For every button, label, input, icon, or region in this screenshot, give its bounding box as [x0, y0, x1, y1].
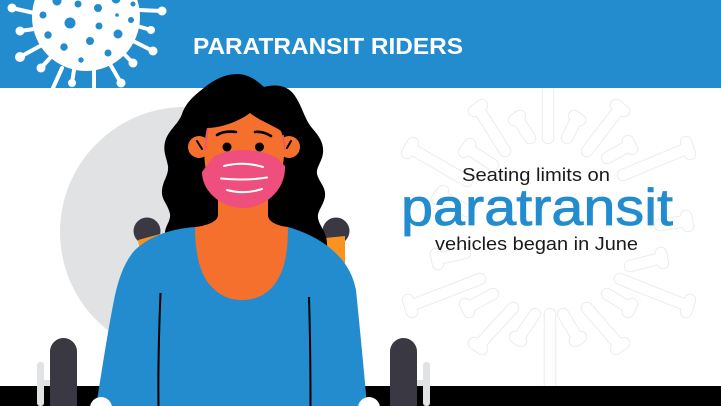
icon: virus watermark — [407, 82, 690, 392]
floor bar — [0, 386, 721, 406]
wheelchair — [37, 218, 430, 406]
ears — [188, 136, 300, 158]
hair — [162, 74, 327, 250]
header band — [0, 0, 721, 88]
shirt — [96, 227, 367, 406]
text block: seating limits: vehicles began in June — [435, 233, 638, 254]
grey background circle — [60, 107, 310, 357]
skin: neck and chest — [195, 195, 288, 300]
text block: seating limits: paratransit — [401, 179, 674, 237]
icon: virus — [8, 0, 166, 88]
text block: seating limits — [401, 164, 674, 254]
text block: seating limits: Seating limits on — [462, 164, 610, 185]
heading: PARATRANSIT RIDERS — [193, 33, 463, 59]
hands — [90, 397, 380, 406]
shirt creases — [158, 293, 310, 406]
face mask — [202, 128, 285, 208]
eyes and eyebrows — [217, 132, 271, 152]
face — [204, 113, 284, 175]
